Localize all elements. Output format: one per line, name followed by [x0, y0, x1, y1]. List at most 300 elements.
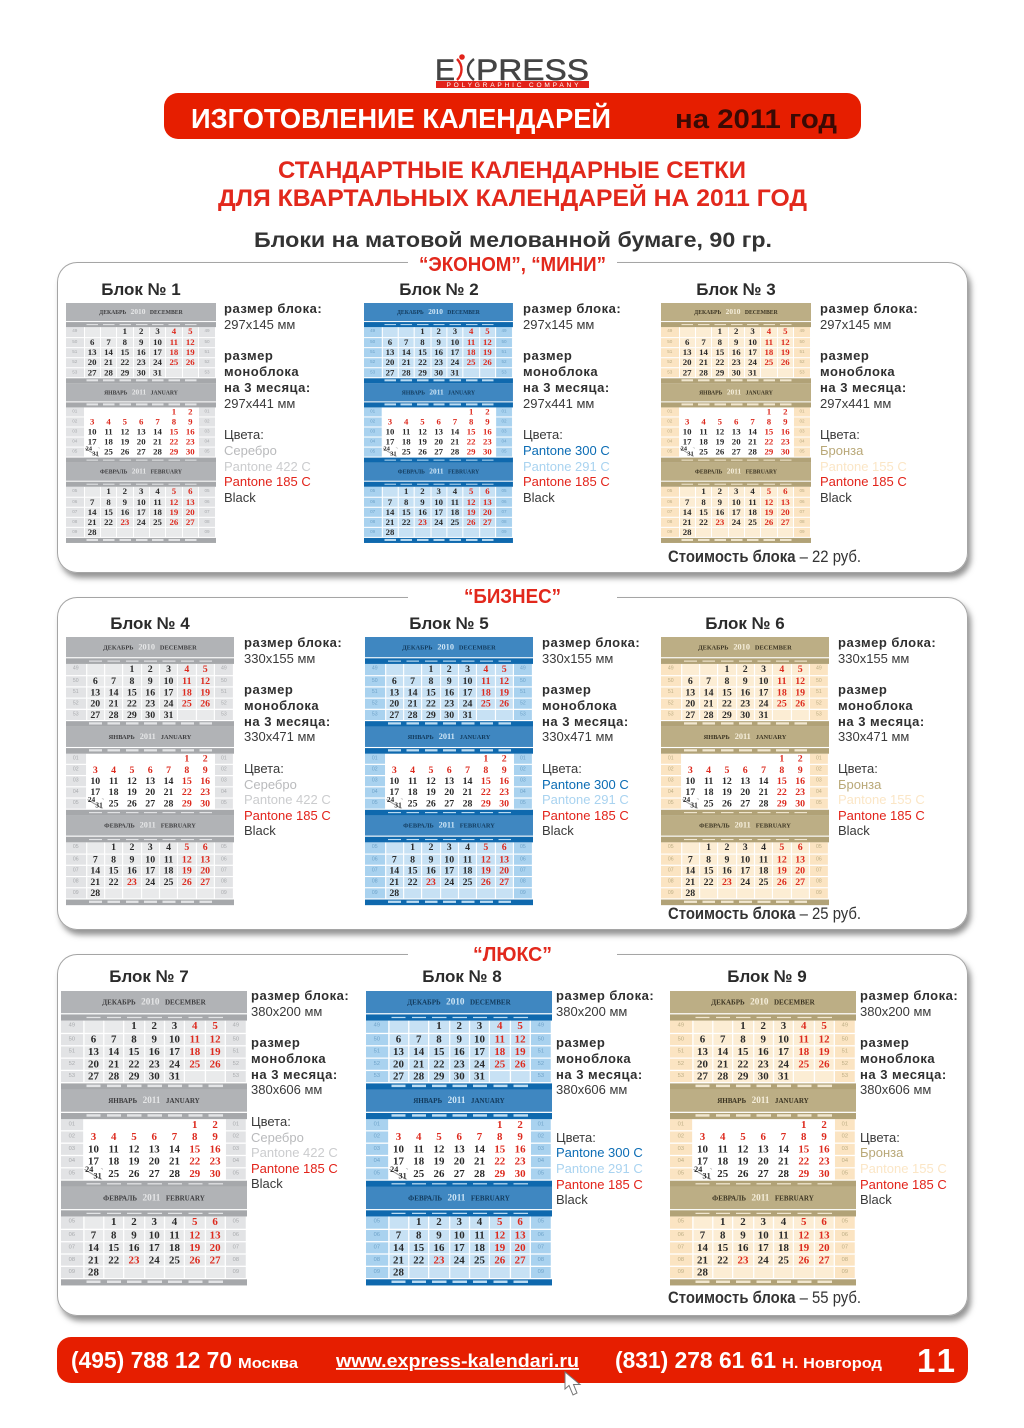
calendar block 6: 51 — [668, 688, 674, 694]
calendar block 7: 20 — [149, 1155, 160, 1167]
calendar block 4: 23 — [127, 875, 137, 887]
calendar block 3: 8 — [701, 496, 706, 506]
calendar block 4: 31 — [95, 801, 103, 809]
logo: POLYGRAPHIC COMPANY — [446, 82, 579, 89]
calendar block 7: 5 — [192, 1215, 198, 1228]
calendar block 5: 25 — [408, 797, 418, 809]
calendar block 4: 09 — [73, 889, 79, 894]
calendar block 2: 12 — [467, 496, 475, 506]
calendar block 5: 3 — [392, 764, 397, 775]
calendar block 1: 1 — [172, 406, 176, 416]
calendar block 8: 52 — [374, 1059, 380, 1066]
calendar block 9: 06 — [678, 1231, 684, 1237]
calendar block 7: 10 — [169, 1032, 180, 1045]
calendar block 8: 4 — [497, 1019, 503, 1032]
calendar block 6: 16 — [795, 775, 805, 786]
calendar block 4: 01 — [221, 754, 227, 760]
calendar block 8: 21 — [474, 1155, 485, 1167]
calendar block 5: 8 — [428, 675, 433, 686]
block 6 specs: 330x155 мм — [838, 651, 909, 666]
calendar block 8: 16 — [515, 1143, 526, 1155]
calendar block 6: 31 — [759, 708, 768, 719]
calendar block 6: 30 — [795, 797, 805, 809]
calendar block 6: 22 — [777, 786, 787, 797]
calendar block 2: 05 — [370, 488, 375, 493]
calendar block 5: 04 — [372, 788, 378, 794]
calendar block 3: 01 — [667, 408, 672, 413]
calendar block 4: 5 — [203, 663, 208, 674]
calendar block 1: 6 — [188, 486, 192, 496]
phone: Moscow: Москва — [238, 1355, 299, 1372]
calendar block 4: 09 — [221, 889, 227, 894]
calendar block 1: 53 — [72, 369, 77, 374]
calendar block 6: 04 — [816, 788, 822, 794]
calendar block 5: 19 — [481, 864, 491, 875]
calendar block 1: 7 — [90, 496, 94, 506]
calendar block 5: 6 — [502, 841, 507, 852]
calendar block 5: 15 — [426, 686, 436, 697]
calendar block 4: 07 — [73, 866, 79, 872]
calendar block 9: 10 — [778, 1032, 789, 1045]
calendar block 5: 05 — [372, 800, 378, 805]
block 2 specs: на 3 месяца: — [523, 380, 610, 395]
calendar block 7: 52 — [233, 1059, 239, 1066]
title: making calendars: ИЗГОТОВЛЕНИЕ КАЛЕНДАРЕЙ — [191, 102, 611, 134]
calendar block 3: 23 — [781, 437, 790, 447]
block 3 specs: на 3 месяца: — [820, 380, 907, 395]
block 3 specs: моноблока — [820, 364, 895, 379]
calendar block 8: 3 — [457, 1215, 462, 1228]
calendar block 8: 6 — [396, 1032, 401, 1045]
calendar block 7: 53 — [69, 1072, 75, 1078]
calendar block 4: 19 — [200, 686, 210, 697]
calendar block 2: 18 — [451, 506, 459, 516]
calendar block 9: 5 — [801, 1215, 807, 1228]
calendar block 6: 15 — [777, 775, 787, 786]
calendar block 7: 05 — [233, 1170, 239, 1176]
calendar block 2: 5 — [420, 416, 425, 426]
calendar block 9: 05 — [678, 1218, 684, 1224]
calendar block 4: 16 — [200, 775, 210, 786]
calendar block 5: 8 — [483, 764, 488, 775]
calendar block 3: 21 — [683, 516, 692, 526]
calendar block 6: 24 — [740, 875, 750, 887]
calendar block 5: 18 — [463, 864, 472, 875]
panel heading: luxe — [408, 944, 617, 966]
calendar block 6: 11 — [704, 775, 713, 786]
calendar block 4: 8 — [129, 675, 134, 686]
block 7 specs: Серебро — [251, 1130, 304, 1145]
calendar block 6: 27 — [685, 708, 695, 719]
calendar block 1: 28 — [153, 447, 162, 457]
calendar block 1: 50 — [72, 339, 77, 344]
calendar block 6: 25 — [704, 797, 714, 809]
calendar block 1: 17 — [137, 506, 146, 516]
calendar block 7: 4 — [192, 1019, 198, 1032]
calendar block 1: 25 — [169, 357, 178, 367]
calendar block 5: 26 — [426, 797, 436, 809]
calendar block 2: 1 — [404, 486, 408, 496]
calendar block 7: 20 — [88, 1057, 99, 1069]
calendar block 4: 5 — [184, 841, 189, 852]
calendar block 1: 10 — [137, 496, 146, 506]
calendar block 2: 11 — [467, 337, 475, 347]
calendar block 4: 13 — [200, 853, 210, 864]
calendar block 6: 4 — [779, 663, 784, 674]
calendar block 7: 28 — [88, 1265, 99, 1277]
calendar block 1: 9 — [139, 337, 143, 347]
calendar block 6: 52 — [816, 699, 822, 705]
block 4 specs: Pantone 185 C — [244, 808, 331, 823]
calendar block 8: 15 — [413, 1240, 424, 1253]
calendar block 5: 4 — [483, 663, 488, 674]
calendar block 9: 2 — [821, 1117, 827, 1130]
calendar block 6: 01 — [668, 754, 674, 760]
calendar block 1: 21 — [88, 516, 97, 526]
calendar block 8: 21 — [393, 1253, 404, 1265]
block 5 specs: моноблока — [542, 698, 617, 713]
calendar block 9: 53 — [842, 1072, 848, 1078]
calendar block 8: 08 — [538, 1255, 544, 1261]
calendar block 7: 02 — [233, 1133, 239, 1139]
calendar block 3: 17 — [732, 506, 741, 516]
calendar block 2: 26 — [467, 516, 475, 526]
calendar block 9: 13 — [758, 1143, 769, 1155]
calendar block 4: 1 — [129, 663, 134, 674]
block 2 specs: размер блока: — [523, 301, 621, 316]
calendar block 2: 3 — [388, 416, 392, 426]
calendar block 4: 04 — [73, 788, 79, 794]
block 1 specs: моноблока — [224, 364, 299, 379]
block 5 specs: Цвета: — [542, 761, 582, 776]
calendar block 6: 26 — [777, 875, 787, 887]
calendar block 1: 4 — [155, 486, 160, 496]
calendar block 3: 26 — [781, 357, 790, 367]
calendar block 1: 03 — [204, 428, 210, 434]
calendar block 8: 6 — [517, 1215, 523, 1228]
calendar block 7: 22 — [189, 1155, 200, 1167]
calendar block 7: 10 — [149, 1228, 160, 1240]
price: economy: Стоимость блока – 22 руб. — [668, 547, 861, 566]
calendar block 4: 14 — [164, 775, 173, 786]
block 8 specs: 380x200 мм — [556, 1004, 627, 1019]
calendar block 5: 1 — [410, 841, 415, 852]
calendar block 7: 01 — [69, 1120, 75, 1126]
calendar block 9: 09 — [842, 1268, 848, 1274]
calendar block 7: 23 — [210, 1155, 221, 1167]
calendar block 4: 01 — [73, 754, 79, 760]
calendar block 9: 16 — [738, 1240, 748, 1253]
calendar block 9: 24 — [694, 1166, 702, 1175]
calendar block 8: 19 — [515, 1045, 526, 1057]
calendar block 4: 26 — [127, 797, 137, 809]
calendar block 8: 31 — [474, 1069, 485, 1082]
calendar block 6: ЯНВАРЬ 2011 JANUARY — [704, 731, 786, 741]
calendar block 4: 30 — [145, 708, 155, 719]
calendar block 6: 9 — [798, 764, 803, 775]
calendar block 6: ДЕКАБРЬ 2010 DECEMBER — [698, 641, 792, 652]
calendar block 5: 30 — [499, 797, 509, 809]
calendar block 4: 16 — [145, 686, 155, 697]
calendar block 3: 18 — [748, 506, 757, 516]
calendar block 3: 4 — [701, 416, 706, 426]
calendar block 8: 05 — [538, 1170, 544, 1176]
calendar block 9: 29 — [798, 1167, 809, 1179]
calendar block 2: ФЕВРАЛЬ 2011 FEBRUARY — [398, 467, 479, 476]
calendar block 8: 05 — [538, 1218, 544, 1224]
calendar block 7: 9 — [212, 1130, 218, 1143]
calendar block 7: 27 — [88, 1069, 99, 1082]
calendar block 2: 02 — [370, 418, 375, 423]
calendar block 4: 50 — [221, 677, 227, 682]
calendar block 9: 9 — [761, 1032, 766, 1045]
calendar block 2: 18 — [402, 437, 411, 447]
calendar block 5: 23 — [499, 786, 509, 797]
calendar block 7: ЯНВАРЬ 2011 JANUARY — [108, 1094, 200, 1105]
calendar block 5: 50 — [520, 677, 526, 682]
calendar block 7: 07 — [233, 1243, 239, 1249]
calendar block 9: 4 — [781, 1215, 786, 1228]
calendar block 6: 29 — [777, 797, 787, 809]
calendar block 1: 01 — [204, 408, 210, 413]
calendar block 9: 2 — [761, 1019, 766, 1032]
calendar block 7: 03 — [233, 1145, 239, 1151]
block 7 specs: на 3 месяца: — [251, 1067, 338, 1082]
calendar block 3: 50 — [799, 339, 805, 344]
calendar block 7: 25 — [108, 1167, 119, 1179]
calendar block 5: 2 — [428, 841, 433, 852]
block 7 specs: 380x606 мм — [251, 1082, 322, 1097]
calendar block 1: 9 — [188, 416, 192, 426]
calendar block 3: 5 — [718, 416, 722, 426]
calendar block 1: 4 — [172, 326, 176, 336]
calendar block 7: 1 — [192, 1117, 198, 1130]
calendar block 1: 12 — [169, 496, 178, 506]
calendar block 7: 22 — [129, 1057, 139, 1069]
calendar block 1: 10 — [88, 426, 97, 437]
block 8 specs: Black — [556, 1192, 588, 1207]
calendar block 7: 29 — [189, 1167, 200, 1179]
calendar block 4: 5 — [129, 764, 134, 775]
calendar block 9: 15 — [717, 1240, 728, 1253]
block 5 specs — [542, 635, 640, 838]
calendar block 9: 23 — [758, 1057, 769, 1069]
calendar block 4: 28 — [90, 887, 100, 898]
calendar block 2: 30 — [483, 447, 492, 457]
calendar block 6: 2 — [743, 663, 748, 674]
calendar block 9: 02 — [842, 1133, 848, 1139]
calendar block 3: 9 — [718, 496, 722, 506]
calendar block 8: 09 — [374, 1268, 380, 1274]
calendar block 8: 19 — [494, 1240, 505, 1253]
calendar block 4: 24 — [164, 697, 173, 708]
block 1 specs: Black — [224, 490, 256, 505]
calendar block 4: ФЕВРАЛЬ 2011 FEBRUARY — [104, 820, 196, 830]
calendar block 1: 06 — [72, 498, 77, 503]
calendar block 9: 05 — [678, 1170, 684, 1176]
calendar block 3: 26 — [715, 447, 724, 457]
calendar block 4: 51 — [73, 688, 79, 694]
calendar block 5: 16 — [426, 864, 436, 875]
calendar block 6: 08 — [668, 878, 674, 883]
calendar block 1: 5 — [123, 416, 127, 426]
calendar block 4: 27 — [90, 708, 100, 719]
calendar block 6: 10 — [759, 675, 768, 686]
calendar block 5: 06 — [520, 855, 526, 861]
calendar block 6: 09 — [816, 889, 822, 894]
calendar block 5: 23 — [426, 875, 436, 887]
calendar block 1: 26 — [120, 447, 129, 457]
calendar block 1: 14 — [88, 506, 97, 516]
calendar block 1: 19 — [186, 347, 195, 357]
calendar block 2: 28 — [451, 447, 459, 457]
calendar block 2: 22 — [402, 516, 411, 526]
calendar block 5: 17 — [389, 786, 399, 797]
calendar block 1: 2 — [123, 486, 127, 496]
calendar block 2: 02 — [501, 418, 507, 423]
calendar block 1: 15 — [104, 506, 113, 516]
calendar block 1: 3 — [155, 326, 160, 336]
calendar block 2: 53 — [370, 369, 375, 374]
calendar block 2: 21 — [402, 357, 411, 367]
calendar block 5: 9 — [502, 764, 507, 775]
block 7 title: Блок № 7 — [109, 967, 189, 986]
calendar block 5: 17 — [444, 864, 454, 875]
block 2 specs: Pantone 185 C — [523, 474, 610, 489]
calendar block 6: 15 — [704, 864, 714, 875]
calendar block 1: 51 — [72, 349, 77, 354]
calendar block 6: 20 — [740, 786, 750, 797]
calendar block 1: 16 — [120, 506, 129, 516]
block 5 specs: Pantone 185 C — [542, 808, 629, 823]
panel heading: business — [408, 586, 617, 608]
block 3 specs: 297x145 мм — [820, 317, 891, 332]
calendar block 2: 4 — [469, 326, 473, 336]
calendar block 2: 05 — [501, 449, 507, 454]
calendar block 3: 06 — [799, 498, 805, 503]
calendar block 8: 4 — [477, 1215, 482, 1228]
calendar block 7: 06 — [233, 1231, 239, 1237]
calendar block 6: 09 — [668, 889, 674, 894]
calendar block 9: 23 — [738, 1253, 748, 1265]
calendar block 9: ФЕВРАЛЬ 2011 FEBRUARY — [712, 1192, 814, 1203]
calendar block 7: 11 — [190, 1032, 200, 1045]
calendar block 3: 1 — [701, 486, 706, 496]
calendar block 3: 28 — [683, 526, 692, 536]
calendar block 6: 53 — [816, 710, 822, 716]
calendar block 6: 8 — [724, 675, 729, 686]
block 1 specs: 297x441 мм — [224, 396, 295, 411]
calendar block 1: 7 — [106, 337, 111, 347]
calendar block 5: 52 — [372, 699, 378, 705]
calendar block 8: 22 — [434, 1057, 444, 1069]
calendar block 7: 4 — [172, 1215, 177, 1228]
block 6 specs: 330x471 мм — [838, 729, 909, 744]
calendar block 4: 27 — [145, 797, 155, 809]
calendar block 4: 50 — [73, 677, 79, 682]
calendar block 8: 9 — [436, 1228, 442, 1240]
calendar block 1: ЯНВАРЬ 2011 JANUARY — [104, 387, 178, 396]
calendar block 9: 04 — [678, 1157, 684, 1163]
calendar block 7: 4 — [111, 1130, 116, 1143]
calendar block 9: 31 — [703, 1171, 711, 1180]
calendar block 3: 7 — [701, 337, 706, 347]
calendar block 8: 49 — [374, 1022, 380, 1028]
calendar block 7: 09 — [69, 1268, 75, 1274]
calendar block 3: 1 — [718, 326, 722, 336]
calendar block 4: 20 — [145, 786, 155, 797]
calendar block 9: 13 — [697, 1045, 708, 1057]
calendar block 9: 24 — [778, 1057, 789, 1069]
calendar block 6: 23 — [795, 786, 805, 797]
calendar block 2: 8 — [404, 496, 408, 506]
footer contact bar — [57, 1337, 968, 1383]
calendar block 5: 02 — [520, 766, 526, 772]
calendar block 8: 08 — [374, 1255, 380, 1261]
calendar block 6: 24 — [683, 796, 690, 804]
calendar block 4: 15 — [109, 864, 119, 875]
calendar block 1: 09 — [204, 528, 210, 533]
block 6 specs: на 3 месяца: — [838, 714, 925, 729]
calendar block 5: 14 — [463, 775, 472, 786]
calendar block 4: 6 — [203, 841, 208, 852]
calendar block 7: 22 — [108, 1253, 119, 1265]
block 1 specs: размер — [224, 348, 273, 363]
calendar block 1: 01 — [72, 408, 77, 413]
calendar block 1: 27 — [137, 447, 146, 457]
calendar block 5: 5 — [428, 764, 433, 775]
calendar block 5: 09 — [520, 889, 526, 894]
calendar block 3: 05 — [799, 488, 805, 493]
calendar block 8: 29 — [434, 1069, 444, 1082]
block 4 specs: Pantone 422 C — [244, 792, 331, 807]
calendar block 6: 19 — [777, 864, 787, 875]
calendar block 6: 02 — [668, 766, 674, 772]
calendar block 3: ФЕВРАЛЬ 2011 FEBRUARY — [695, 467, 777, 476]
calendar block 4: 11 — [109, 775, 118, 786]
calendar block 1: 13 — [137, 426, 146, 437]
calendar block 3: 14 — [683, 506, 692, 516]
calendar block 3: 10 — [683, 426, 692, 437]
calendar block 4: 4 — [111, 764, 116, 775]
calendar block 1: 12 — [186, 337, 195, 347]
calendar block 4: 17 — [145, 864, 155, 875]
calendar block 9: 18 — [778, 1240, 789, 1253]
calendar block 5: 10 — [389, 775, 399, 786]
calendar block 6: 18 — [704, 786, 714, 797]
calendar block 4: 22 — [109, 875, 119, 887]
calendar block 1: 31 — [153, 367, 162, 377]
calendar block 5: 31 — [463, 708, 472, 719]
calendar block 7: 7 — [91, 1228, 96, 1240]
subheading: paper: Блоки на матовой мелованной бумаге, 90 гр. — [254, 228, 772, 252]
calendar block 6: 11 — [777, 675, 786, 686]
calendar block 5: 4 — [410, 764, 415, 775]
block 8 specs — [556, 988, 654, 1207]
calendar block 5: 04 — [520, 788, 526, 794]
calendar block 7: 5 — [212, 1019, 218, 1032]
calendar block 6: 15 — [722, 686, 732, 697]
block 3 specs: Pantone 185 C — [820, 474, 907, 489]
calendar block 3: 7 — [750, 416, 755, 426]
calendar block 1: 50 — [204, 339, 210, 344]
calendar block 1: 23 — [120, 516, 129, 526]
calendar block 2: 27 — [386, 367, 394, 377]
calendar block 9: 25 — [798, 1057, 809, 1069]
calendar block 6: 6 — [798, 841, 803, 852]
calendar block 7: 13 — [149, 1143, 160, 1155]
calendar block 2: 49 — [501, 328, 507, 333]
